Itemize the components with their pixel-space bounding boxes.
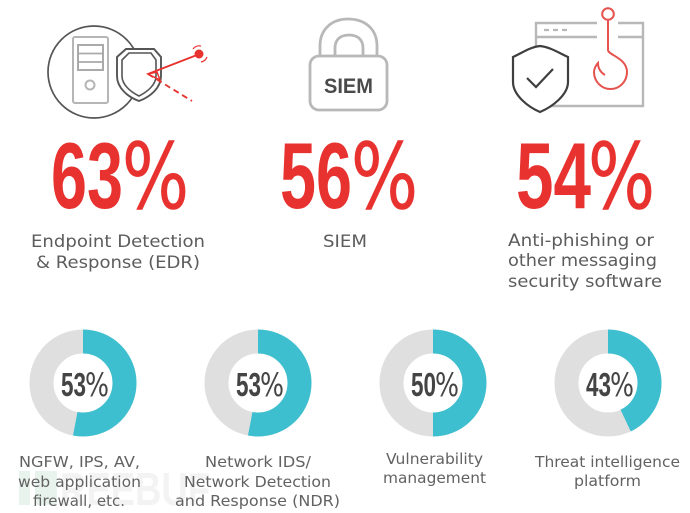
- donut: 43% threat intelligence: [566, 342, 650, 424]
- label: NDR: and Response (NDR): [175, 492, 340, 510]
- donut: 50% vulnerability: %: [435, 366, 459, 404]
- donut: 50% vulnerability: 50: [411, 366, 436, 403]
- label: threat intelligence: Threat intelligence: [534, 453, 680, 471]
- label: NGFW: [18, 453, 141, 510]
- label: NGFW: NGFW, IPS, AV,: [19, 453, 140, 471]
- donut: 50% vulnerability: [392, 342, 474, 424]
- label: anti-phishing: Anti-phishing or: [508, 231, 654, 250]
- label: vulnerability: management: [383, 469, 486, 487]
- label: anti-phishing: other messaging: [508, 251, 657, 270]
- stat: 56%: 56: [280, 123, 352, 228]
- stat: 54%: %: [588, 125, 655, 230]
- label: vulnerability: Vulnerability: [386, 450, 483, 468]
- donut: 53% NDR: %: [260, 366, 284, 404]
- label: NDR: Network Detection: [184, 473, 331, 491]
- donut: 53% NGFW: 53: [61, 366, 86, 403]
- label: vulnerability: [383, 450, 486, 487]
- label: EDR: & Response (EDR): [36, 253, 200, 272]
- label: SIEM: SIEM: [323, 232, 367, 251]
- icon: phishing hook with shield: [513, 8, 643, 112]
- stat: 63%: %: [122, 125, 189, 230]
- icon: SIEM padlock: [310, 19, 387, 110]
- watermark: [19, 463, 210, 513]
- donut: 53% NGFW: %: [85, 366, 109, 404]
- donut: 43% threat intelligence: 43: [586, 366, 611, 403]
- stat: 63%: 63: [51, 123, 123, 228]
- donut: 43% threat intelligence: %: [610, 366, 634, 404]
- donut: 53% NDR: 53: [236, 366, 261, 403]
- stat: 56%: %: [351, 125, 418, 230]
- label: NDR: Network IDS/: [205, 453, 312, 471]
- label: EDR: [31, 232, 205, 272]
- donut: 53% NDR: [216, 342, 300, 424]
- stat: 54%: 54: [516, 123, 591, 228]
- icon: SIEM padlock: SIEM: [324, 75, 373, 98]
- label: EDR: Endpoint Detection: [31, 232, 205, 251]
- label: NGFW: firewall, etc.: [33, 492, 125, 510]
- icon: endpoint server with shield: [48, 26, 207, 118]
- donut: 53% NGFW: [42, 342, 124, 424]
- label: threat intelligence: [534, 453, 680, 490]
- label: anti-phishing: [508, 231, 662, 291]
- label: anti-phishing: security software: [508, 272, 662, 291]
- label: NDR: [175, 453, 340, 510]
- label: NGFW: web application: [18, 473, 141, 491]
- label: threat intelligence: platform: [574, 472, 641, 490]
